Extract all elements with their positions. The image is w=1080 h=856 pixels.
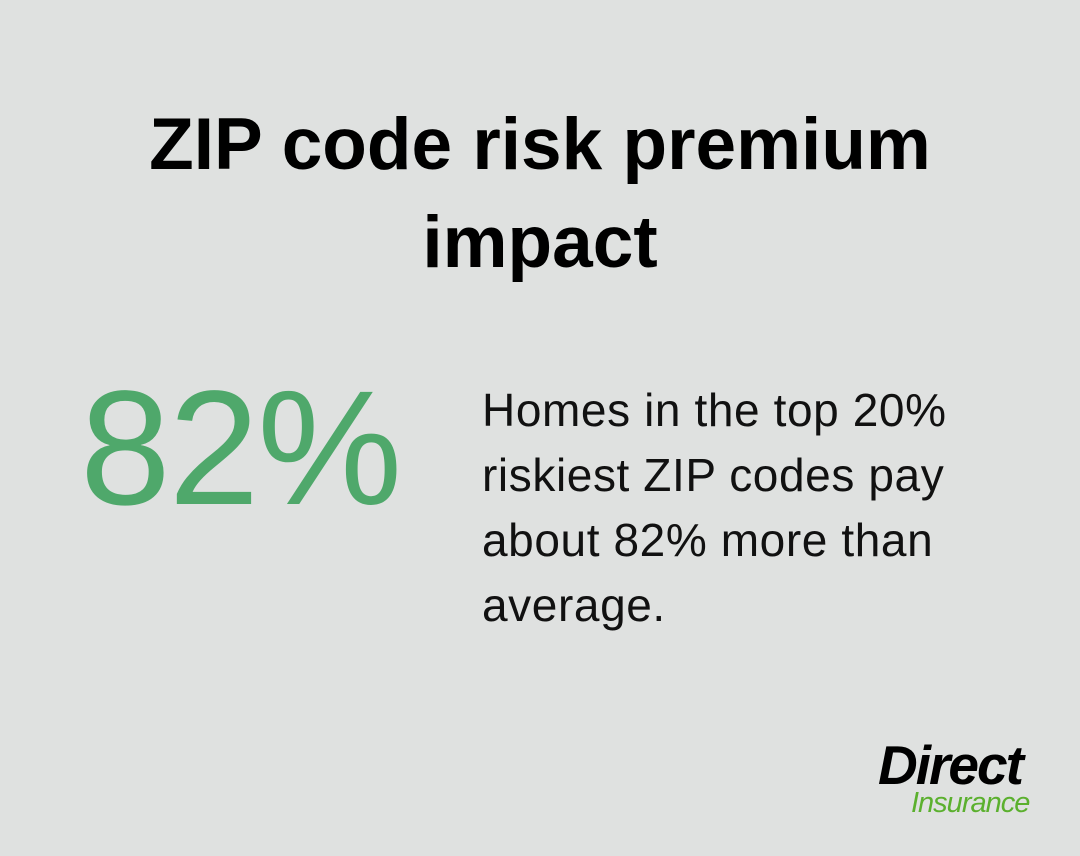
description text: average. bbox=[482, 579, 666, 631]
big stat: 82%: 82% bbox=[80, 356, 400, 539]
logo: Direct Insurance: Direct bbox=[878, 734, 1022, 796]
title: ZIP code risk premium bbox=[149, 104, 931, 185]
description text: riskiest ZIP codes pay bbox=[482, 449, 944, 501]
description text: about 82% more than bbox=[482, 514, 933, 566]
title: impact bbox=[422, 202, 658, 283]
logo: Direct Insurance: Insurance bbox=[911, 787, 1029, 819]
description text: Homes in the top 20% bbox=[482, 384, 947, 436]
title bbox=[149, 104, 931, 283]
description text bbox=[482, 384, 947, 631]
logo: Direct Insurance bbox=[878, 734, 1030, 819]
